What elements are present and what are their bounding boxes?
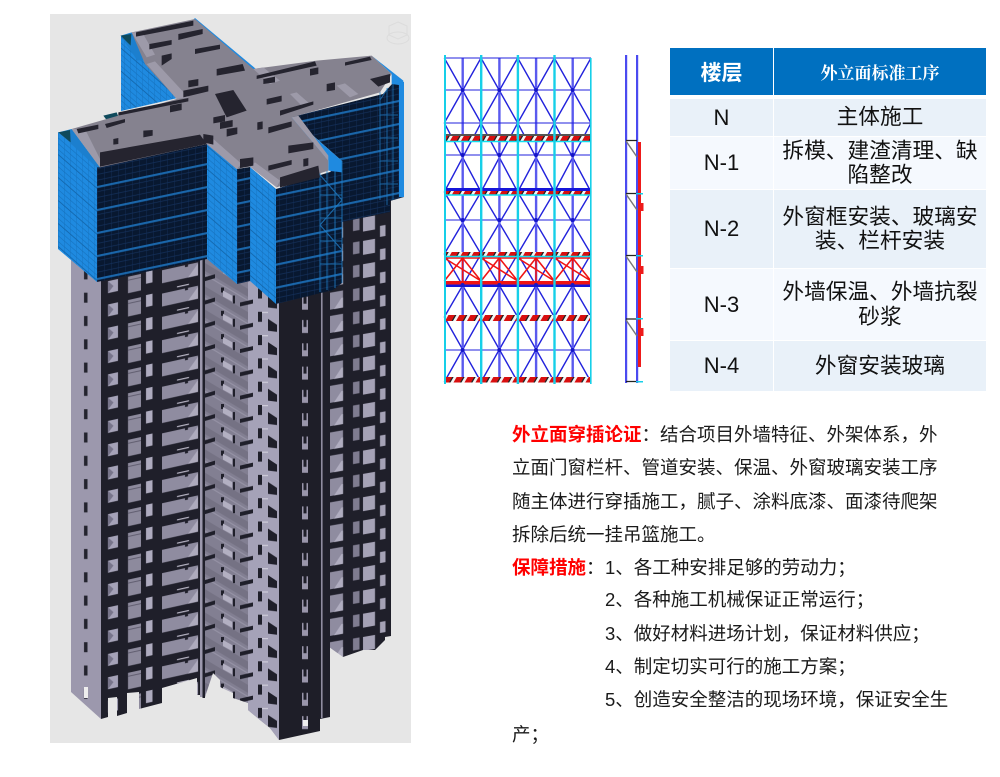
row N-3: floor xyxy=(670,269,773,340)
tower: concrete frame xyxy=(71,200,391,740)
row N-1: procedure: 拆模、建渣清理、缺陷整改 xyxy=(782,138,978,187)
scaffold: left end face xyxy=(58,132,97,282)
text block: facade interleaving rationale: 立面门窗栏杆、管道安装、保温、外窗玻璃安装工序 xyxy=(512,457,938,478)
table header: procedure: 外立面标准工序 xyxy=(820,64,940,83)
row N-3: floor: N-3 xyxy=(704,292,739,316)
roof: scaffold top edges around slab xyxy=(58,32,403,172)
icon: faint view cube xyxy=(387,22,409,44)
table header: floor xyxy=(670,48,773,95)
text block: facade interleaving rationale: 外立面穿插论证：结合项目外墙特征、外架体系，外 xyxy=(512,424,938,445)
row N: procedure xyxy=(774,99,986,136)
roof: dark parapets and shafts xyxy=(77,21,390,187)
text block: safeguard measures: 3、做好材料进场计划，保证材料供应； xyxy=(605,623,930,644)
row N-3: procedure: 外墙保温、外墙抗裂砂浆 xyxy=(782,279,978,328)
row N-2: procedure xyxy=(774,190,986,268)
tower face: right wing xyxy=(329,200,391,657)
text block: safeguard measures xyxy=(512,557,948,745)
scaffold: right rear dark screen xyxy=(292,81,404,222)
scaffold front elevation drawing xyxy=(444,55,592,384)
row N-1: floor: N-1 xyxy=(704,150,739,175)
row N-3: procedure xyxy=(774,269,986,340)
tower face: dark core column xyxy=(279,280,320,740)
tower joint line xyxy=(200,250,205,698)
scaffold: back top edge xyxy=(192,18,262,76)
row N: floor: N xyxy=(714,104,729,130)
scaffold: corner face xyxy=(250,167,276,304)
tower face: front windows xyxy=(101,240,202,719)
row N: floor xyxy=(670,99,773,136)
text block: safeguard measures: 4、制定切实可行的施工方案； xyxy=(605,656,856,677)
scaffold side section drawing xyxy=(625,55,644,383)
text block: safeguard measures: 5、创造安全整洁的现场环境，保证安全生 xyxy=(605,689,948,710)
side section: uprights xyxy=(625,55,638,383)
climbing scaffold: blue protection screens xyxy=(58,18,404,304)
text block: facade interleaving rationale: 随主体进行穿插施工，腻子、涂料底漆、面漆待爬架 xyxy=(512,491,938,512)
table header: procedure xyxy=(774,48,986,95)
row N-4: floor: N-4 xyxy=(704,353,739,378)
text block: safeguard measures: 产； xyxy=(512,724,549,745)
side section: cyan ties xyxy=(636,193,643,382)
side section: brackets xyxy=(626,140,638,382)
row N-4: procedure: 外窗安装玻璃 xyxy=(815,353,945,378)
roof slab with parapets xyxy=(58,19,403,187)
text block: safeguard measures: 保障措施： xyxy=(512,557,605,578)
row N-2: floor xyxy=(670,190,773,268)
table: facade standard procedures by floor xyxy=(670,48,986,391)
row N-2: procedure: 外窗框安装、玻璃安装、栏杆安装 xyxy=(782,204,978,253)
scaffold: narrow dark screen xyxy=(237,167,250,284)
scaffold: right front dark screen xyxy=(276,161,342,304)
text block: safeguard measures: 1、各工种安排足够的劳动力； xyxy=(605,557,856,578)
row N-2: floor: N-2 xyxy=(704,216,739,241)
scaffold: front dark screen xyxy=(97,144,207,282)
row N-4: procedure xyxy=(774,341,986,391)
tower face: recessed balconies xyxy=(204,250,279,740)
table header: floor: 楼层 xyxy=(700,62,742,84)
text block: facade interleaving rationale xyxy=(512,424,938,545)
bottom window opening xyxy=(303,720,308,726)
row N-4: floor xyxy=(670,341,773,391)
illustration: 3D building model with attached climbing scaffold xyxy=(50,14,411,743)
text block: facade interleaving rationale: 拆除后统一挂吊篮施工。 xyxy=(512,524,716,545)
side section: red protection strip xyxy=(638,142,644,367)
row N: procedure: 主体施工 xyxy=(837,104,923,129)
row N-1: floor xyxy=(670,137,773,189)
scaffold uprights xyxy=(444,55,592,384)
scaffold: back wing xyxy=(121,36,182,111)
scaffold: return face xyxy=(207,144,237,284)
scaffold: right rear frame end xyxy=(380,84,398,205)
tower face: left end wall xyxy=(71,240,101,719)
image background xyxy=(50,14,411,743)
roof: slab xyxy=(72,19,392,187)
text block: safeguard measures: 2、各种施工机械保证正常运行； xyxy=(605,589,874,610)
scaffold: corner frame xyxy=(320,161,342,292)
tower face: dark side column xyxy=(320,280,330,719)
roof: light wall tops xyxy=(72,31,358,187)
scaffold bays xyxy=(444,58,591,382)
